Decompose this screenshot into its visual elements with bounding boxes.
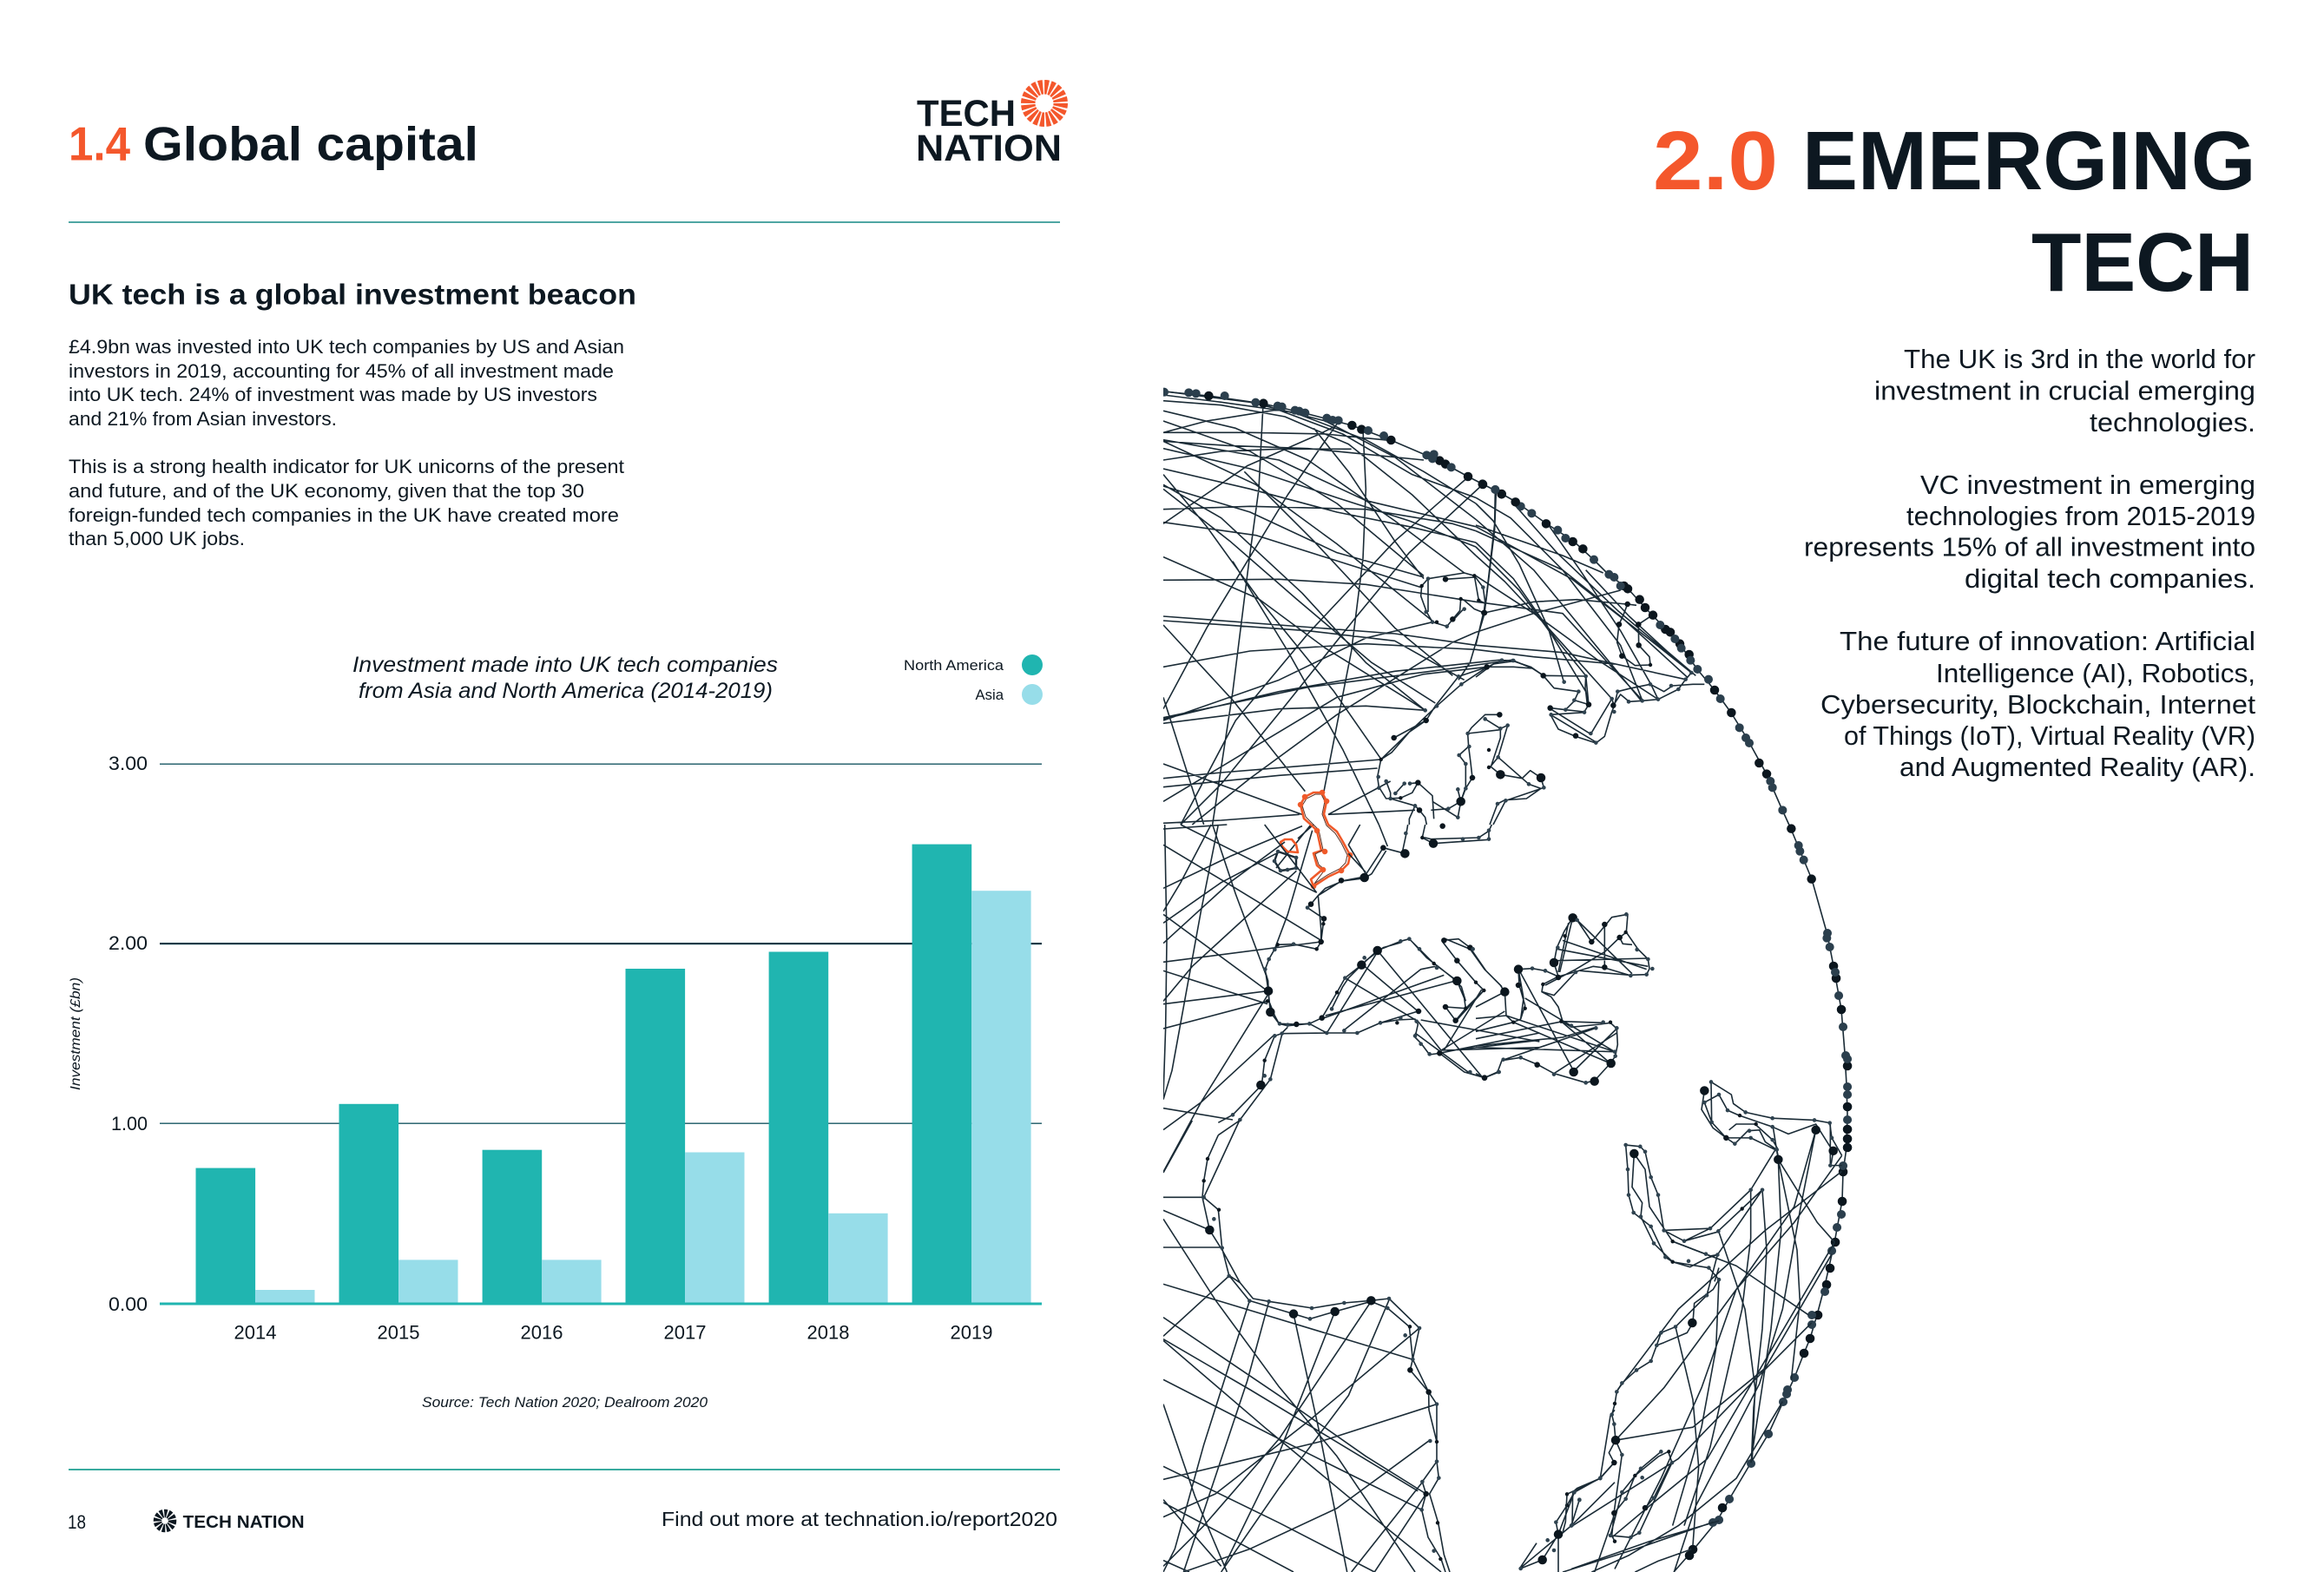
text block: emerging tech summary: Intelligence (AI), Robotics, bbox=[1936, 658, 2255, 688]
panel: left page global capital bbox=[68, 87, 1062, 1533]
y-axis values: 1.00 bbox=[111, 1113, 148, 1135]
title: Global capital bbox=[143, 116, 478, 170]
heading: 2.0 Emerging Tech: TECH bbox=[2031, 216, 2254, 309]
West Africa upper bbox=[1218, 1035, 1282, 1122]
text block: emerging tech summary: The UK is 3rd in the world for bbox=[1904, 344, 2255, 374]
heading: 2.0 Emerging Tech: EMERGING bbox=[1802, 115, 2255, 207]
France and Iberia coast bbox=[1265, 825, 1491, 1024]
legend: Asia bbox=[976, 687, 1004, 703]
logo: Tech Nation: NATION bbox=[916, 128, 1062, 169]
Irish dark loop bbox=[1274, 852, 1296, 871]
heading: 2.0 Emerging Tech bbox=[1653, 115, 2255, 309]
x-axis years: 2017 bbox=[664, 1321, 706, 1344]
bar chart bbox=[69, 753, 1042, 1344]
chord network and coast: Europe and North Africa bbox=[1163, 825, 1539, 1172]
text block: emerging tech summary: technologies. bbox=[2090, 407, 2255, 437]
chord network: north-west bbox=[1163, 391, 1544, 825]
text block: intro paragraphs: and 21% from Asian investors. bbox=[69, 408, 337, 430]
text block: emerging tech summary: of Things (IoT), Virtual Reality (VR) bbox=[1844, 720, 2255, 751]
y-axis values: 3.00 bbox=[109, 753, 148, 774]
x-axis years: 2018 bbox=[807, 1321, 849, 1344]
icon: footer sunburst bbox=[158, 1514, 172, 1528]
chart title: Investment made into UK tech companies bbox=[352, 653, 778, 677]
legend: North America bbox=[904, 657, 1004, 674]
logo: Tech Nation: TECH bbox=[917, 93, 1016, 135]
rim dots north-east bbox=[1573, 542, 1767, 774]
x-axis years: 2019 bbox=[951, 1321, 992, 1344]
text block: emerging tech summary: represents 15% of all investment into bbox=[1804, 532, 2255, 562]
chord network and coast: Middle East and East Africa bbox=[1563, 1082, 1842, 1572]
heading: UK tech is a global investment beacon bbox=[69, 278, 636, 311]
Mediterranean chords bbox=[1274, 950, 1539, 1078]
Kola and Russia coast bbox=[1476, 604, 1704, 743]
text block: intro paragraphs: into UK tech. 24% of investment was made by US investors bbox=[69, 384, 597, 405]
chord network: north-east bbox=[1476, 484, 1782, 810]
bars: North America bbox=[196, 845, 971, 1303]
text block: intro paragraphs: investors in 2019, accounting for 45% of all investment made bbox=[69, 360, 614, 382]
heading: 2.0 Emerging Tech: 2.0 bbox=[1653, 115, 1778, 207]
footer bbox=[68, 1508, 1057, 1533]
text block: intro paragraphs: £4.9bn was invested into UK tech companies by US and Asian bbox=[69, 336, 624, 358]
x-axis years: 2014 bbox=[234, 1321, 276, 1344]
chart title: from Asia and North America (2014-2019) bbox=[359, 679, 773, 703]
rim dots east bbox=[1791, 829, 1812, 879]
y-axis values: 2.00 bbox=[109, 932, 148, 954]
text block: emerging tech summary: VC investment in emerging bbox=[1920, 470, 2255, 500]
Norway coast bbox=[1378, 661, 1544, 825]
footer: 18 bbox=[68, 1511, 86, 1533]
text block: intro paragraphs: This is a strong health indicator for UK unicorns of the present bbox=[69, 456, 624, 477]
panel: right page emerging tech bbox=[1163, 115, 2255, 1572]
Scandinavia bbox=[1431, 714, 1544, 825]
x-axis years: 2015 bbox=[378, 1321, 419, 1344]
globe rim bbox=[1163, 391, 1847, 1572]
footer: TECH NATION bbox=[183, 1512, 305, 1532]
text block: emerging tech summary: and Augmented Reality (AR). bbox=[1899, 752, 2255, 782]
UK highlighted bbox=[1274, 793, 1350, 886]
x-axis years bbox=[234, 1321, 992, 1344]
chart title bbox=[352, 653, 778, 703]
text block: intro paragraphs: than 5,000 UK jobs. bbox=[69, 528, 245, 549]
text block: intro paragraphs: and future, and of the UK economy, given that the top 30 bbox=[69, 480, 584, 502]
text block: intro paragraphs: foreign-funded tech companies in the UK have created more bbox=[69, 504, 619, 526]
globe network illustration bbox=[1163, 387, 1853, 1572]
bars: Asia bbox=[255, 891, 1031, 1303]
text block: emerging tech summary: The future of innovation: Artificial bbox=[1840, 626, 2255, 656]
Turkey and eastern Mediterranean bbox=[1476, 829, 1830, 1082]
x-axis years: 2016 bbox=[521, 1321, 563, 1344]
East Africa coast lower-left bbox=[1519, 1410, 1615, 1572]
chord network and coast: West Africa and Atlantic bbox=[1163, 1121, 1615, 1572]
legend bbox=[904, 654, 1043, 705]
rim dots north bbox=[1208, 396, 1502, 494]
text block: emerging tech summary: digital tech companies. bbox=[1965, 563, 2255, 594]
footer: Find out more at technation.io/report2020 bbox=[662, 1508, 1057, 1530]
text block: emerging tech summary bbox=[1804, 344, 2255, 782]
text block: emerging tech summary: investment in crucial emerging bbox=[1874, 375, 2255, 406]
Italy bbox=[1443, 939, 1504, 1022]
text block: emerging tech summary: technologies from 2015-2019 bbox=[1906, 501, 2255, 531]
text block: emerging tech summary: Cybersecurity, Blockchain, Internet bbox=[1820, 689, 2255, 720]
logo: Tech Nation bbox=[916, 87, 1062, 169]
text block: intro paragraphs bbox=[69, 336, 624, 549]
y-axis values bbox=[109, 753, 148, 1315]
y-axis values: 0.00 bbox=[109, 1293, 148, 1315]
source note: Source: Tech Nation 2020; Dealroom 2020 bbox=[422, 1394, 708, 1411]
title: 1.4 bbox=[69, 116, 130, 170]
Iceland bbox=[1421, 573, 1485, 627]
y-axis label: Investment (£bn) bbox=[69, 977, 83, 1090]
